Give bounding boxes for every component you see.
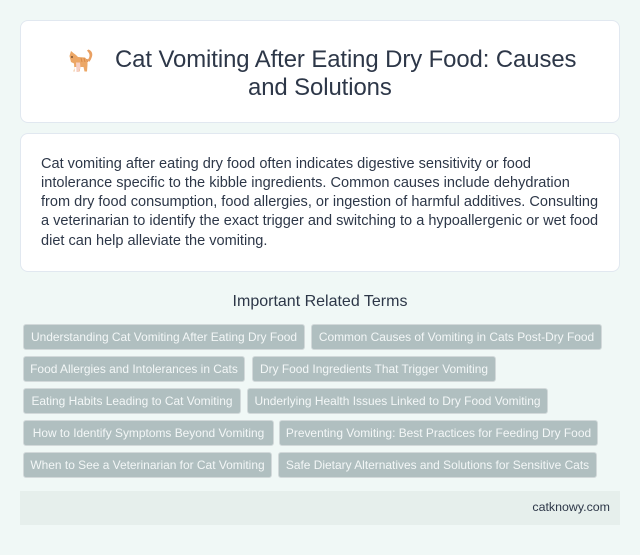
panel: related term tags: How to Identify Symptoms Beyond Vomiting xyxy=(33,426,264,440)
panel: summary text xyxy=(20,133,620,272)
panel: related term tags: Food Allergies and Intolerances in Cats xyxy=(30,362,238,376)
panel: summary text: a veterinarian to identify the exact trigger and switching to a hypoallergenic or wet food xyxy=(41,213,598,229)
panel: related term tags: Underlying Health Issues Linked to Dry Food Vomiting xyxy=(254,394,540,408)
title: Cat Vomiting After Eating Dry Food: Causes xyxy=(115,46,576,73)
panel: related term tags: Common Causes of Vomiting in Cats Post-Dry Food xyxy=(319,330,594,344)
panel: related term tags: Understanding Cat Vomiting After Eating Dry Food xyxy=(31,330,297,344)
panel: related term tags: Safe Dietary Alternatives and Solutions for Sensitive Cats xyxy=(286,458,589,472)
panel: related term tags: Dry Food Ingredients That Trigger Vomiting xyxy=(260,362,488,376)
panel: related term tags: Preventing Vomiting: Best Practices for Feeding Dry Food xyxy=(286,426,591,440)
footer: catknowy.com xyxy=(532,500,610,514)
panel: related term tags: Eating Habits Leading to Cat Vomiting xyxy=(31,394,233,408)
panel: summary text: from dry food consumption, food allergies, or ingestion of harmful additives. Consulting xyxy=(41,194,598,210)
panel: related term tags: When to See a Veterinarian for Cat Vomiting xyxy=(30,458,265,472)
icon: cat xyxy=(70,50,92,72)
footer xyxy=(20,491,620,525)
title xyxy=(115,46,576,101)
panel: summary text: diet can help alleviate the vomiting. xyxy=(41,233,267,249)
title: and Solutions xyxy=(248,74,392,101)
panel: summary text: Cat vomiting after eating dry food often indicates digestive sensitivity or food xyxy=(41,156,531,172)
heading: important related terms: Important Related Terms xyxy=(233,293,407,310)
panel: title card xyxy=(20,20,620,123)
panel: related term tags xyxy=(23,324,602,478)
panel: summary text: intolerance specific to the kibble ingredients. Common causes include dehydration xyxy=(41,175,570,191)
